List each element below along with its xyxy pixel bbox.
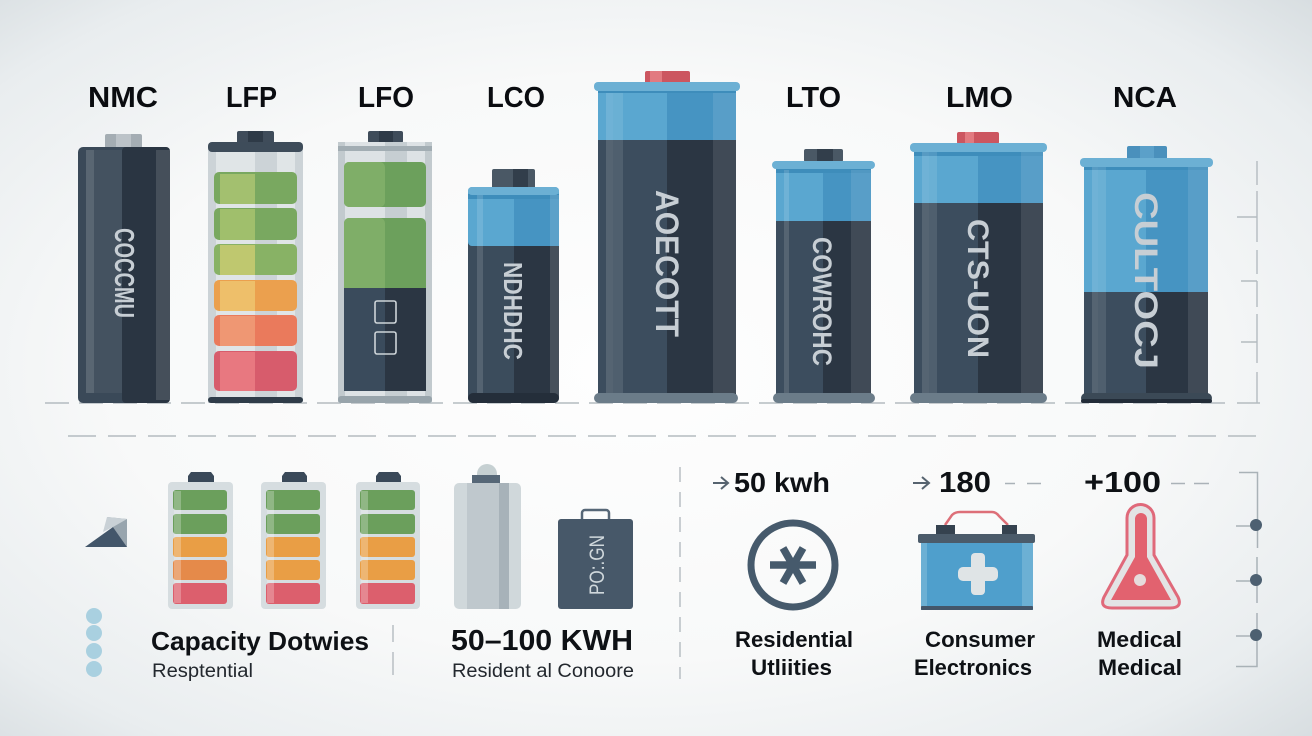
small battery 2 (261, 472, 326, 609)
heading: LFO: LFO (358, 82, 414, 114)
lower green and dark block (344, 218, 426, 391)
label: AOECOTT (649, 190, 685, 337)
bag label: PO:.GN (586, 535, 609, 595)
battery: NCA (1080, 146, 1213, 403)
heading: LFP: LFP (226, 82, 277, 114)
bag icon (558, 510, 633, 609)
value: +100: +100 (1084, 467, 1161, 499)
text: consumer electronics: Electronics (914, 655, 1032, 680)
text: residential utilities: Residential (735, 627, 853, 652)
heading: LTO: LTO (786, 82, 841, 114)
text: medical: Medical (1098, 655, 1182, 680)
label on LCO: NDHDHC (498, 262, 528, 360)
arrow: 180 (913, 477, 929, 489)
text: consumer electronics: Consumer (925, 627, 1035, 652)
text: medical (1097, 627, 1182, 680)
battery: LCO (468, 169, 559, 403)
text: kwh subheading: Resident al Conoore (452, 661, 634, 682)
label: CTS-UON (961, 219, 994, 358)
arrow: 50 kwh (713, 477, 728, 489)
label: CULTOCJ (1128, 192, 1164, 369)
text: capacity subheading: Resptential (152, 661, 253, 682)
value: 50 kwh: 50 kwh (734, 467, 830, 498)
small battery 1 (168, 472, 233, 609)
heading: NMC: NMC (88, 82, 158, 114)
heading: LCO: LCO (487, 82, 545, 114)
heading: LMO: LMO (946, 82, 1013, 114)
battery: NMC (78, 134, 170, 403)
value: 180: 180 (939, 467, 991, 499)
scale: upper right (1237, 161, 1260, 403)
battery: LFP (208, 131, 303, 403)
text: medical: Medical (1097, 627, 1182, 652)
text: residential utilities (735, 627, 853, 680)
icon: medical flask (1103, 504, 1179, 608)
icon: residential asterisk (751, 523, 835, 607)
text: consumer electronics (914, 627, 1035, 680)
upper green block (344, 162, 426, 207)
label: COWROHC (807, 237, 837, 366)
text: capacity heading: Capacity Dotwies (151, 626, 369, 656)
text: residential utilities: Utliities (751, 655, 832, 680)
battery: LFO (338, 131, 432, 403)
battery: tall unlabeled (594, 71, 740, 403)
scale: lower right with markers (1236, 472, 1262, 666)
gray battery (454, 464, 521, 609)
cells (214, 172, 297, 391)
battery: LTO (772, 149, 875, 403)
label on NMC: COCCMU (109, 228, 140, 318)
small battery 3 (356, 472, 420, 609)
icon: triangle shard (85, 517, 127, 547)
dots column (86, 608, 102, 677)
heading: NCA: NCA (1113, 82, 1177, 114)
battery: LMO (910, 132, 1047, 403)
icon: car battery (918, 512, 1035, 610)
text: kwh range: 50–100 KWH (451, 625, 633, 657)
